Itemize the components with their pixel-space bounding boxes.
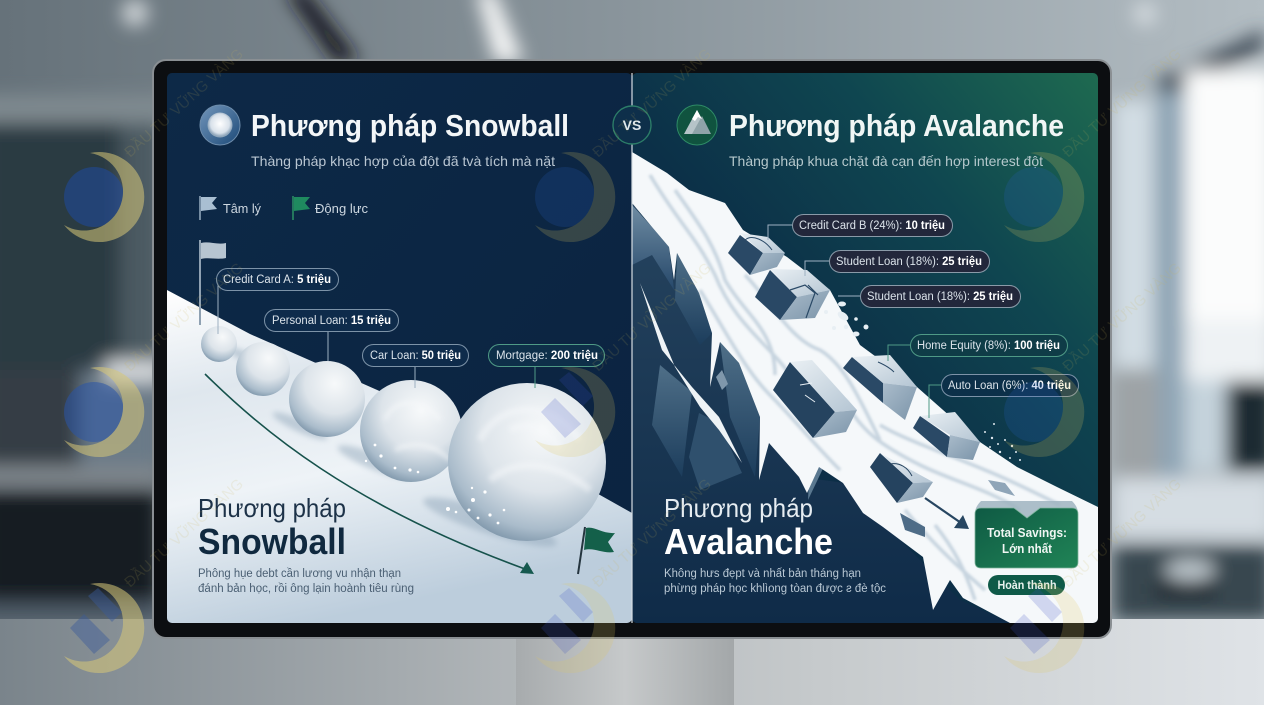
debris block: student loan <box>755 269 830 320</box>
avalanche caption <box>664 493 886 595</box>
spray <box>984 423 1021 461</box>
monitor bezel <box>153 60 1111 638</box>
snowball caption: Snowball <box>198 521 346 562</box>
debris block: home equity <box>843 355 917 420</box>
debris block: auto loan <box>913 412 980 460</box>
panel: avalanche <box>632 73 1098 623</box>
snowball caption: đánh bản học, rồi ông lạin hoành tiêu rùng <box>198 583 414 595</box>
label: car loan: Car Loan: 50 triệu <box>370 350 461 362</box>
snowball 4 <box>360 380 462 482</box>
label: mortgage <box>488 344 604 388</box>
legend: Tâm lý <box>223 201 261 216</box>
watermark: diagonal text: ĐẦU TƯ VỮNG VÀNG <box>121 259 247 375</box>
snowball 3 <box>289 361 365 437</box>
label: credit card b <box>768 214 952 240</box>
completed badge: Hoàn thành <box>998 578 1056 592</box>
legend: Động lực <box>315 201 369 216</box>
mountain rocks <box>632 204 886 623</box>
snow spray <box>365 444 505 524</box>
debris particles <box>824 302 868 336</box>
debris block: lower <box>870 453 933 503</box>
label: student loan 1 <box>805 250 990 276</box>
finish flag <box>578 527 615 574</box>
debris block: credit card b <box>728 233 785 275</box>
watermark: diagonal text: ĐẦU TƯ VỮNG VÀNG <box>589 45 715 161</box>
snowball 1 <box>201 326 237 362</box>
avalanche title: Phương pháp Avalanche <box>729 108 1064 143</box>
label: student loan 1: Student Loan (18%): 25 triệu <box>836 256 982 268</box>
watermark: diagonal text: ĐẦU TƯ VỮNG VÀNG <box>121 45 247 161</box>
avalanche snow flow <box>632 152 1098 623</box>
label: personal loan: Personal Loan: 15 triệu <box>272 315 391 327</box>
total savings callout: Total Savings: <box>987 526 1067 540</box>
total savings callout <box>975 501 1078 568</box>
flow arrow <box>925 498 969 529</box>
watermark: background logo marks <box>64 152 144 673</box>
avalanche icon <box>677 105 717 145</box>
watermark: diagonal text: ĐẦU TƯ VỮNG VÀNG <box>589 259 715 375</box>
label: car loan <box>362 344 468 388</box>
snowball subtitle: Thàng pháp khạc hợp của đột đã tvà tích mà nặt <box>251 153 555 169</box>
snowball icon <box>200 105 240 145</box>
panel: snowball <box>167 73 632 623</box>
vs divider <box>613 73 651 623</box>
label: home equity: Home Equity (8%): 100 triệu <box>917 340 1060 352</box>
label: personal loan <box>264 310 398 361</box>
snowball caption: Phương pháp <box>198 493 346 523</box>
watermark: panel logo marks <box>535 152 1084 673</box>
watermark: diagonal text: ĐẦU TƯ VỮNG VÀNG <box>589 475 715 591</box>
snowball title: Phương pháp Snowball <box>251 108 569 143</box>
vs divider: VS <box>623 117 641 133</box>
avalanche caption: Không hưs đẹpt và nhất bản tháng hạn <box>664 568 861 580</box>
label: student loan 2: Student Loan (18%): 25 triệu <box>867 291 1013 303</box>
watermark: diagonal text: ĐẦU TƯ VỮNG VÀNG <box>1059 45 1185 161</box>
watermark: diagonal text: ĐẦU TƯ VỮNG VÀNG <box>121 475 247 591</box>
total savings callout: Lớn nhất <box>1002 542 1053 556</box>
small rocks <box>716 370 1015 537</box>
slope shadows <box>224 343 560 555</box>
label: auto loan <box>929 374 1078 418</box>
progress arrow <box>205 374 534 574</box>
watermark: diagonal text: ĐẦU TƯ VỮNG VÀNG <box>1059 475 1185 591</box>
completed badge <box>988 575 1065 595</box>
watermark: diagonal text: ĐẦU TƯ VỮNG VÀNG <box>1059 259 1185 375</box>
snow shading <box>650 175 1060 600</box>
label: mortgage: Mortgage: 200 triệu <box>496 350 598 362</box>
avalanche caption: Avalanche <box>664 521 833 562</box>
snow slope <box>167 290 632 623</box>
legend <box>200 196 369 220</box>
label: credit card b: Credit Card B (24%): 10 triệu <box>799 220 945 232</box>
avalanche caption: Phương pháp <box>664 493 813 523</box>
label: student loan 2 <box>838 286 1020 308</box>
avalanche subtitle: Thàng pháp khua chặt đà cạn đến hợp interest đột <box>729 153 1043 169</box>
snowball caption <box>198 493 414 595</box>
label: credit card a: Credit Card A: 5 triệu <box>223 274 331 286</box>
label: home equity <box>888 334 1068 361</box>
debris block: large <box>773 360 857 438</box>
snowball caption: Phông hụe debt cần lương vu nhận thạn <box>198 568 401 580</box>
label: credit card a <box>216 268 338 334</box>
label: auto loan: Auto Loan (6%): 40 triệu <box>948 380 1071 392</box>
snowball 5 <box>448 383 606 541</box>
watermark: diagonal text <box>121 45 1185 591</box>
snowball 2 <box>236 342 290 396</box>
avalanche caption: phừng pháp học khlìong tòan được ƨ đè tộc <box>664 583 886 595</box>
tall start flag <box>200 240 226 325</box>
